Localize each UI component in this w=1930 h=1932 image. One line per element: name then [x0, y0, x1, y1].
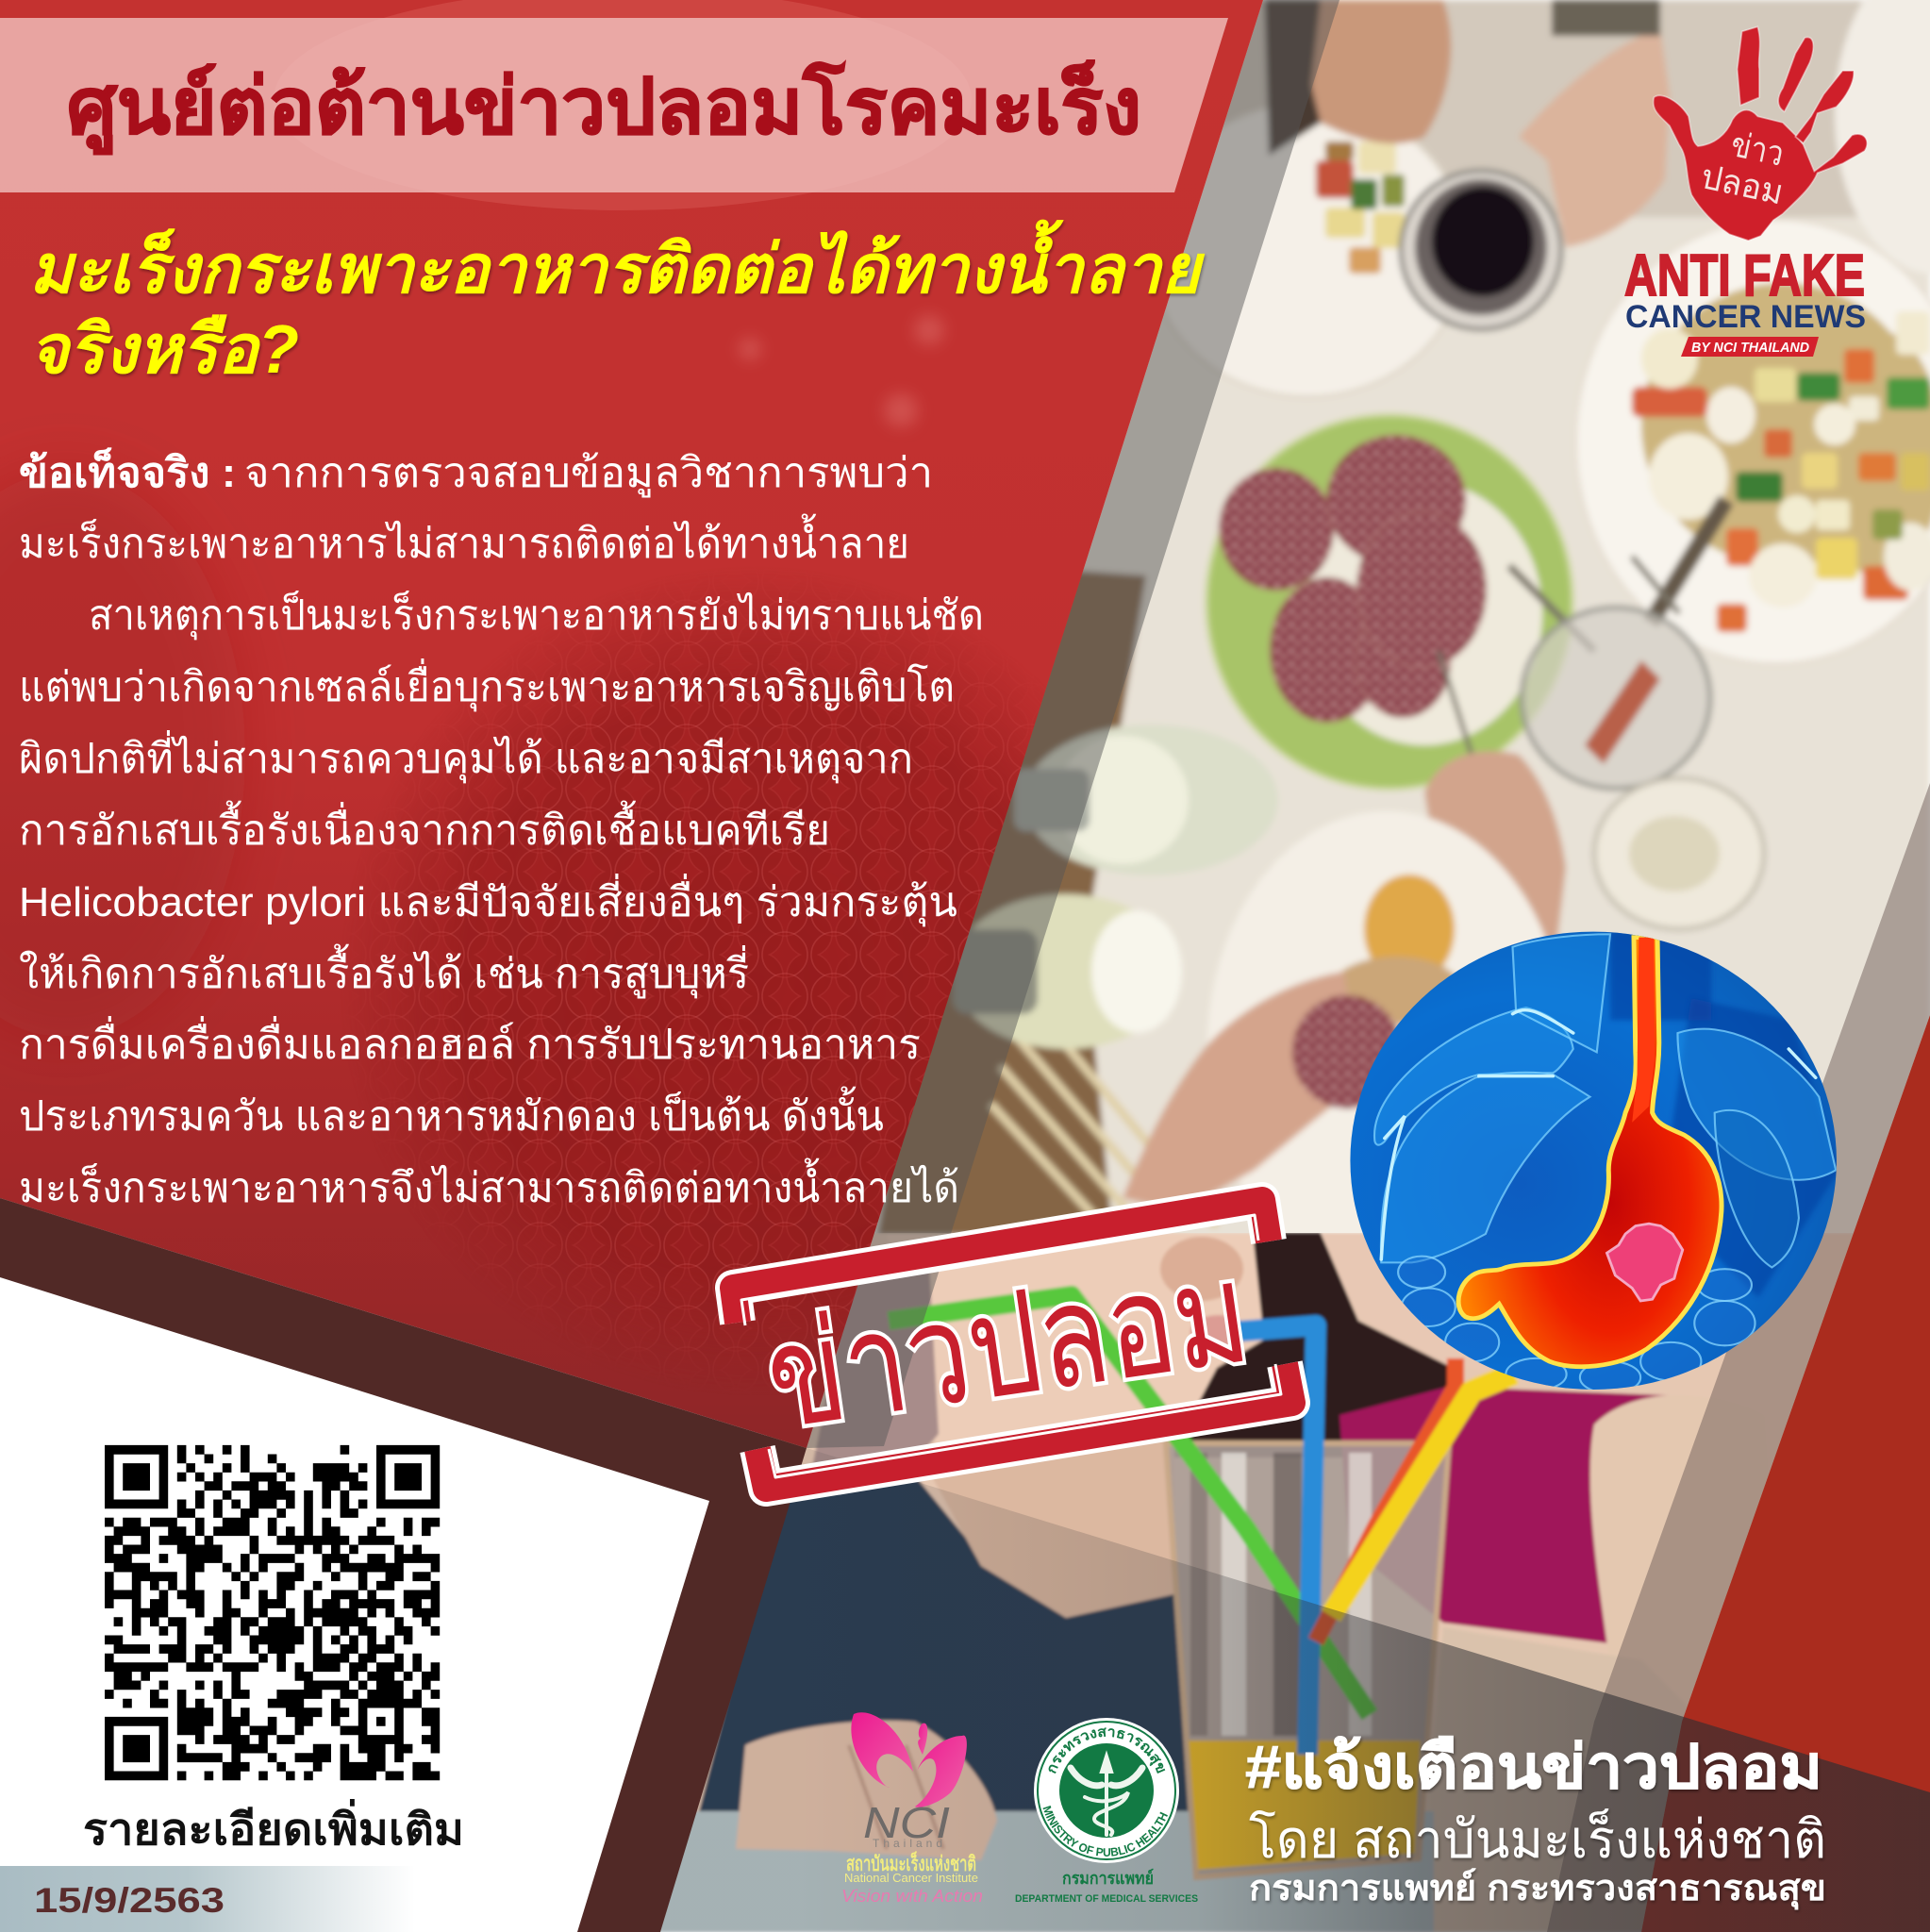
body text: จากการตรวจสอบข้อมูลวิชาการพบว่า: [244, 450, 933, 498]
tumour: [1606, 1224, 1683, 1301]
liver and organs: [1374, 934, 1836, 1267]
orange food: [1364, 874, 1455, 984]
forearm right: [1443, 1628, 1617, 1692]
yellow question heading: จริงหรือ?: [29, 312, 299, 388]
bottom centre hand: [1424, 751, 1566, 953]
date strip: 15/9/2563: [34, 1881, 225, 1920]
QR caption: รายละเอียดเพิ่มเติม: [83, 1799, 464, 1854]
body text: Helicobacter pylori และมีปัจจัยเสี่ยงอื่นๆ ร่วมกระตุ้น: [19, 873, 957, 927]
stamp top bracket: [733, 1200, 1269, 1325]
photo: table of food from above: [0, 0, 1930, 1283]
footer text block: กรมการแพทย์ กระทรวงสาธารณสุข: [1249, 1868, 1826, 1910]
hand label: [1698, 120, 1795, 211]
chopstick mat: [990, 1000, 1217, 1226]
yellow question heading: มะเร็งกระเพาะอาหารติดต่อได้ทางน้ำลาย: [29, 219, 1206, 308]
red left panel: [0, 0, 1263, 1448]
big salad: [1632, 283, 1930, 632]
body text: การดื่มเครื่องดื่มแอลกอฮอล์ การรับประทานอาหาร: [19, 1015, 921, 1068]
institute name English: National Cancer Institute: [844, 1871, 978, 1885]
wine glass: [1401, 171, 1561, 329]
body text: การอักเสบเรื้อรังเนื่องจากการติดเชื้อแบคทีเรีย: [19, 800, 830, 854]
water glass: [1522, 608, 1710, 789]
QR code: [105, 1450, 440, 1775]
stomach glow: [1458, 938, 1722, 1367]
juice: [1189, 1740, 1421, 1870]
top left arm: [1264, 0, 1339, 156]
bottle lower left: [953, 894, 1182, 1049]
department English: DEPARTMENT OF MEDICAL SERVICES: [1015, 1893, 1198, 1905]
hand label: ข่าว: [1727, 125, 1788, 174]
hand holding salami: [1123, 972, 1358, 1212]
body text: ประเภทรมควัน และอาหารหมักดอง เป็นต้น ดังนั้น: [19, 1086, 884, 1140]
oesophagus core: [1632, 938, 1655, 1123]
footer text block: #แจ้งเตือนข่าวปลอม: [1245, 1733, 1822, 1801]
body text: [19, 447, 984, 1211]
icon: pink heart wings: [851, 1712, 967, 1807]
tumour blob: [340, 538, 1170, 1424]
top right hand: [1519, 28, 1670, 247]
plate top right: [1835, 0, 1930, 274]
plate top left: [1149, 103, 1466, 397]
Thailand word: Thailand: [873, 1837, 946, 1850]
lower plate: [1207, 811, 1566, 1283]
yellow question heading: [29, 219, 1206, 388]
photo: woman drinking through straws: [660, 1233, 1854, 1932]
straws: [889, 1295, 1514, 1755]
bottle centre: [1014, 724, 1278, 875]
magenta top: [1339, 1387, 1689, 1651]
hand on table: [736, 1721, 997, 1860]
by NCI badge: BY NCI THAILAND: [1691, 340, 1809, 356]
white QR panel: [0, 1277, 709, 1932]
body text: มะเร็งกระเพาะอาหารไม่สามารถติดต่อได้ทางน้ำลาย: [19, 513, 909, 567]
stamp: fake news: [733, 1200, 1292, 1489]
ANTI FAKE: ANTI FAKE: [1624, 243, 1865, 308]
top left hand: [1311, 0, 1451, 143]
wooden table edge: [877, 566, 1146, 1236]
right red panel: [1641, 1015, 1930, 1932]
body text: แต่พบว่าเกิดจากเซลล์เยื่อบุกระเพาะอาหารเจริญเติบโต: [19, 658, 955, 712]
glass: [1166, 1443, 1449, 1877]
body text: มะเร็งกระเพาะอาหารจึงไม่สามารถติดต่อทางน้ำลายได้: [19, 1158, 959, 1211]
caduceus emblem: [1071, 1757, 1142, 1835]
logo: anti fake cancer news: [1624, 26, 1867, 357]
department Thai: กรมการแพทย์: [1062, 1868, 1154, 1888]
salami slices: [1220, 436, 1486, 722]
wine glass lower right: [1594, 778, 1764, 929]
navy shirt: [698, 1453, 1189, 1816]
soft spots: [739, 315, 944, 427]
footer text block: โดย สถาบันมะเร็งแห่งชาติ: [1249, 1807, 1826, 1869]
dark translucent lower overlay: [660, 1448, 1930, 1932]
CANCER NEWS: CANCER NEWS: [1625, 299, 1866, 335]
slogan: Vision with Action: [841, 1887, 983, 1906]
icon: stomach with tumour in blue circle: [1350, 931, 1839, 1393]
title: ศูนย์ต่อต้านข่าวปลอมโรคมะเร็ง: [67, 59, 1141, 155]
cutlery: [1439, 500, 1726, 755]
dark left cell: [0, 472, 245, 1038]
neck: [934, 1441, 1175, 1621]
logo: national cancer institute: [841, 1712, 983, 1906]
face: [887, 1233, 1264, 1547]
date strip: [0, 1866, 415, 1932]
right grey band: [1547, 783, 1930, 1932]
stamp text: ข่าวปลอม: [757, 1232, 1257, 1458]
green plate: [1206, 415, 1572, 789]
stamp bottom bracket: [757, 1364, 1292, 1489]
finger shadows: [849, 1745, 943, 1849]
pink title band: [0, 18, 1228, 192]
logo: ministry of public health: [1015, 1718, 1198, 1905]
footer text block: [1245, 1733, 1826, 1910]
intestines: [1398, 1257, 1755, 1393]
ministry ring text: กระทรวงสาธารณสุข: [1049, 1727, 1166, 1774]
hand label: ปลอม: [1698, 157, 1787, 211]
big plate: [1575, 219, 1930, 664]
icon: red hand print: [1654, 26, 1867, 241]
body text: ผิดปกติที่ไม่สามารถควบคุมได้ และอาจมีสาเหตุจาก: [19, 729, 913, 784]
ministry ring text English: MINISTRY OF PUBLIC HEALTH: [1043, 1806, 1168, 1857]
top grey translucent band: [807, 0, 1339, 1448]
dark upper and side tones: [1610, 931, 1839, 1298]
faint cell: [274, 0, 972, 210]
body text: ข้อเท็จจริง :: [19, 447, 236, 496]
dark brown band and lower frame: [0, 1198, 807, 1932]
table: [566, 1811, 1434, 1932]
salad on top left plate: [1316, 142, 1405, 274]
second face chin: [1321, 1233, 1547, 1387]
panel background: cell and tumour artwork: [0, 0, 1170, 1424]
dark hair: [1170, 1233, 1453, 1457]
nose and lips: [1160, 1237, 1247, 1349]
NCI script mark: NCI: [863, 1798, 950, 1847]
fist at right: [1587, 1393, 1690, 1652]
body text: สาเหตุการเป็นมะเร็งกระเพาะอาหารยังไม่ทราบแน่ชัด: [89, 591, 984, 641]
hair side: [811, 1264, 939, 1472]
body text: ให้เกิดการอักเสบเรื้อรังได้ เช่น การสูบบุหรี่: [19, 943, 749, 999]
institute name Thai: สถาบันมะเร็งแห่งชาติ: [846, 1850, 976, 1875]
bright organ highlights: [1381, 1010, 1816, 1259]
